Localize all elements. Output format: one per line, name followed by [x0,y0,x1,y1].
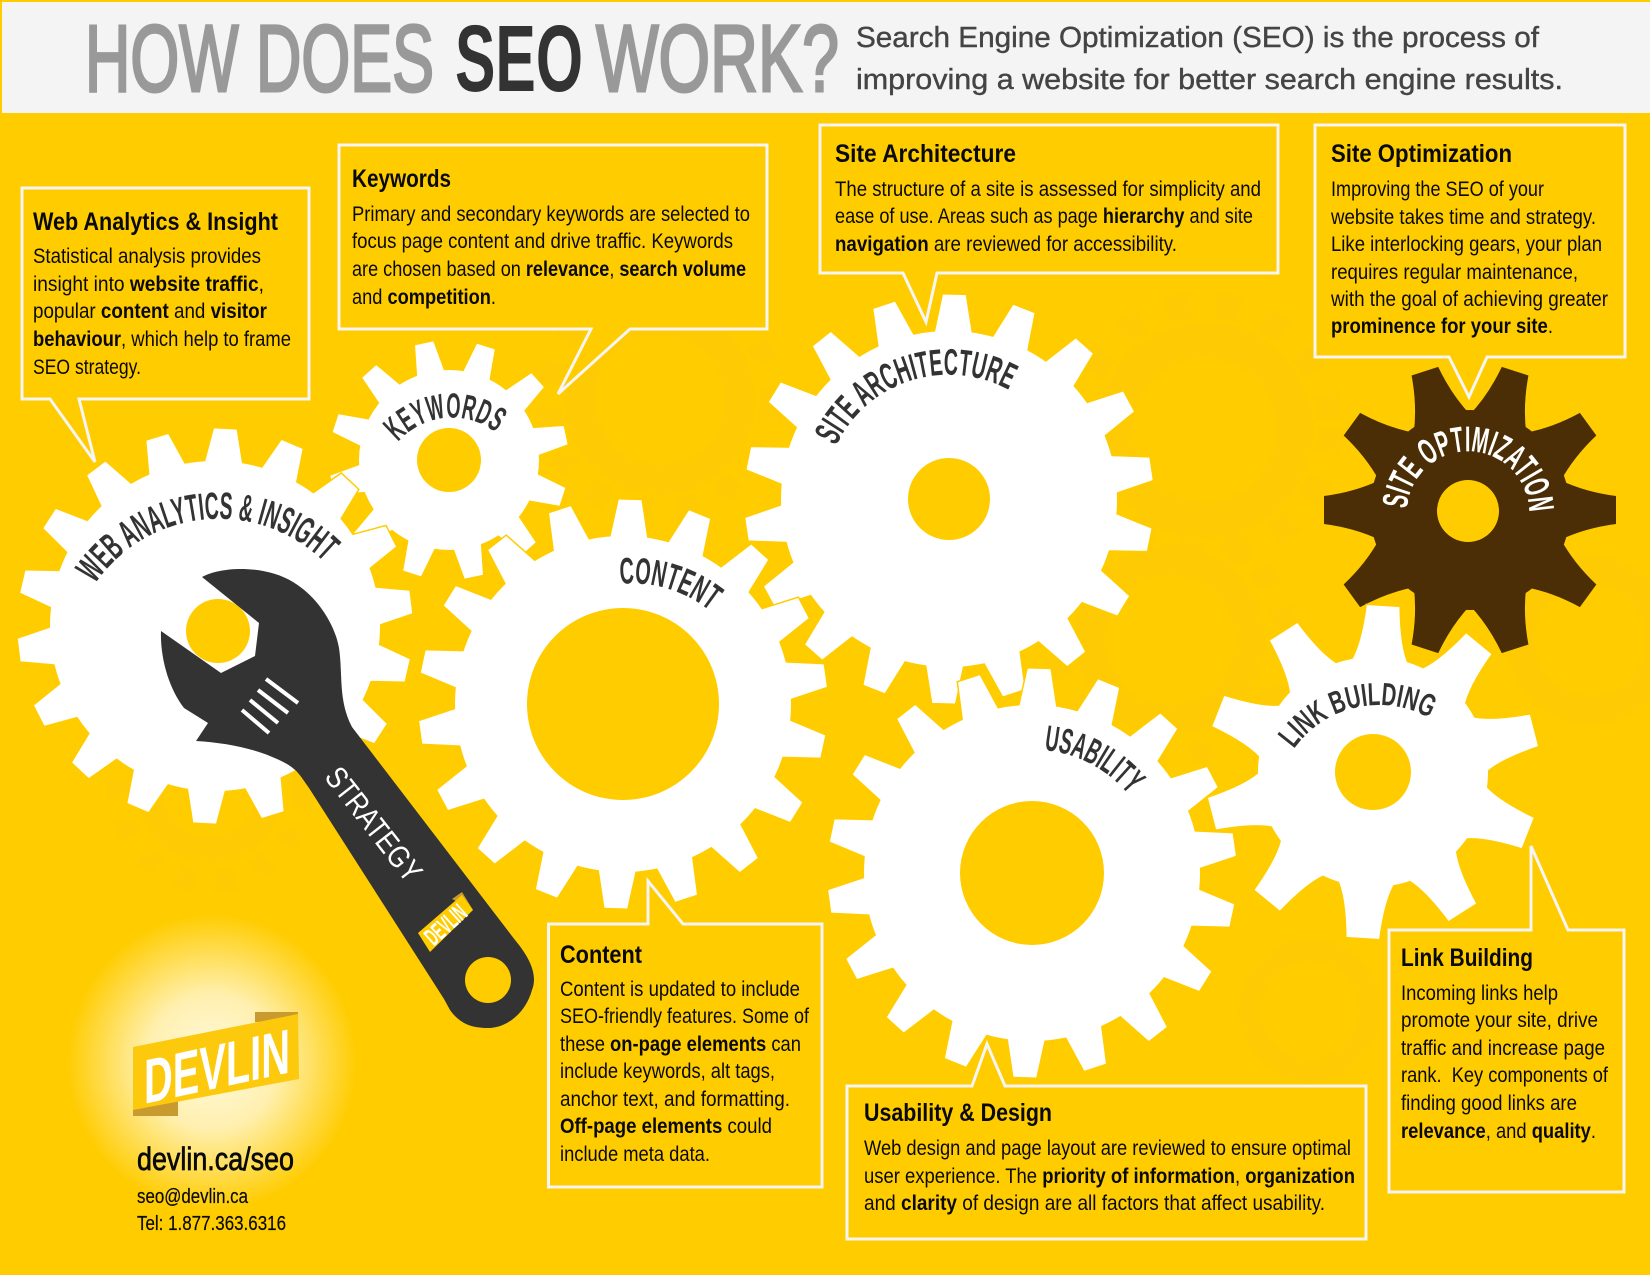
text block: these on-page elements can [560,1032,801,1056]
text block: Statistical analysis provides [33,244,261,268]
title: SEO [455,6,583,112]
text block: focus page content and drive traffic. Keywords [352,229,733,253]
text block: promote your site, drive [1401,1008,1598,1032]
gear: usability [828,668,1236,1078]
text block: ease of use. Areas such as page hierarchy and site [835,204,1253,228]
gear label: keywords: KEYWORDS [382,393,506,441]
panel: usability and design [847,1044,1366,1239]
gear label: site optimization: SITE OPTIMIZATION [1382,426,1554,511]
text block: The structure of a site is assessed for simplicity and [835,177,1261,201]
text block: insight into website traffic, [33,272,264,296]
subtitle [856,22,1563,96]
gear: link building [1208,604,1538,939]
heading: Content [560,941,643,969]
contact details: devlin.ca/seo [137,1141,294,1177]
text block [864,1136,1355,1215]
heading: Site Optimization [1331,140,1512,168]
heading: Site Architecture [835,140,1016,168]
contact details: Tel: 1.877.363.6316 [137,1213,286,1235]
text block: with the goal of achieving greater [1330,287,1608,311]
gear: site architecture [745,294,1153,704]
text block [352,202,750,309]
text block: popular content and visitor [33,299,268,323]
panel: keywords [339,145,767,394]
panel: web analytics and insight [22,188,309,462]
gear label: link building: LINK BUILDING [1278,683,1436,748]
title: HOW DOES [85,6,434,112]
text block [835,177,1261,256]
text block: are chosen based on relevance, search volume [352,257,746,281]
gear: web analytics and insight [18,428,412,824]
text block: prominence for your site. [1331,314,1553,338]
contact details [137,1141,294,1235]
gear: content [419,500,827,908]
title: WORK? [596,6,839,112]
heading: Keywords [352,165,451,193]
logo glow [67,914,357,1210]
wrench tag: devlin: DEVLIN [419,899,473,951]
gear: site optimization [1324,366,1616,654]
text block: website takes time and strategy. [1330,205,1596,229]
text block: Incoming links help [1401,981,1558,1005]
wrench label: strategy: STRATEGY [318,760,429,889]
text block: and competition. [352,285,496,309]
text block: Web design and page layout are reviewed to ensure optimal [864,1136,1351,1160]
heading: Web Analytics & Insight [33,208,279,236]
text block: Off-page elements could [560,1114,772,1138]
icon: wrench grip lines [242,679,298,733]
wrench [161,569,534,1028]
text block [1330,177,1608,338]
text block: anchor text, and formatting. [560,1087,790,1111]
text block: Improving the SEO of your [1331,177,1544,201]
logo: devlin banner [133,1012,299,1118]
text block: rank. Key components of [1401,1063,1608,1087]
panel: site optimization [1315,125,1625,397]
subtitle: Search Engine Optimization (SEO) is the process of [856,22,1540,54]
gear: keywords [330,342,568,579]
text block: traffic and increase page [1401,1036,1605,1060]
text block: behaviour, which help to frame [33,327,291,351]
gear label: site architecture: SITE ARCHITECTURE [816,348,1019,444]
text block: include keywords, alt tags, [560,1059,775,1083]
text block: navigation are reviewed for accessibility. [835,232,1177,256]
text block [33,244,291,379]
text block: Like interlocking gears, your plan [1331,232,1602,256]
header band [2,2,1650,113]
subtitle: improving a website for better search engine results. [856,64,1563,96]
text block [560,977,809,1166]
text block: user experience. The priority of information, organization [864,1164,1355,1188]
contact details: seo@devlin.ca [137,1186,249,1208]
logo: devlin banner: DEVLIN [144,1015,290,1118]
text block: finding good links are [1401,1091,1577,1115]
text block: SEO-friendly features. Some of [560,1004,809,1028]
heading: Link Building [1401,944,1533,972]
wrench tag: devlin [418,892,473,952]
text block: requires regular maintenance, [1331,260,1578,284]
panel: site architecture [820,125,1278,322]
gear label: content: CONTENT [620,558,725,608]
gear label: web analytics and insight: WEB ANALYTICS & INSIGHT [74,492,342,582]
text block: Primary and secondary keywords are selected to [352,202,750,226]
heading: Usability & Design [864,1099,1052,1127]
text block: and clarity of design are all factors that affect usability. [864,1191,1325,1215]
text block [1401,981,1608,1143]
gear label: usability: USABILITY [1046,726,1147,791]
text block: SEO strategy. [33,355,141,379]
text block: relevance, and quality. [1401,1119,1596,1143]
panel: link building [1389,846,1624,1192]
text block: Content is updated to include [560,977,800,1001]
text block: include meta data. [560,1142,710,1166]
title [85,6,839,112]
panel: content [548,881,822,1187]
